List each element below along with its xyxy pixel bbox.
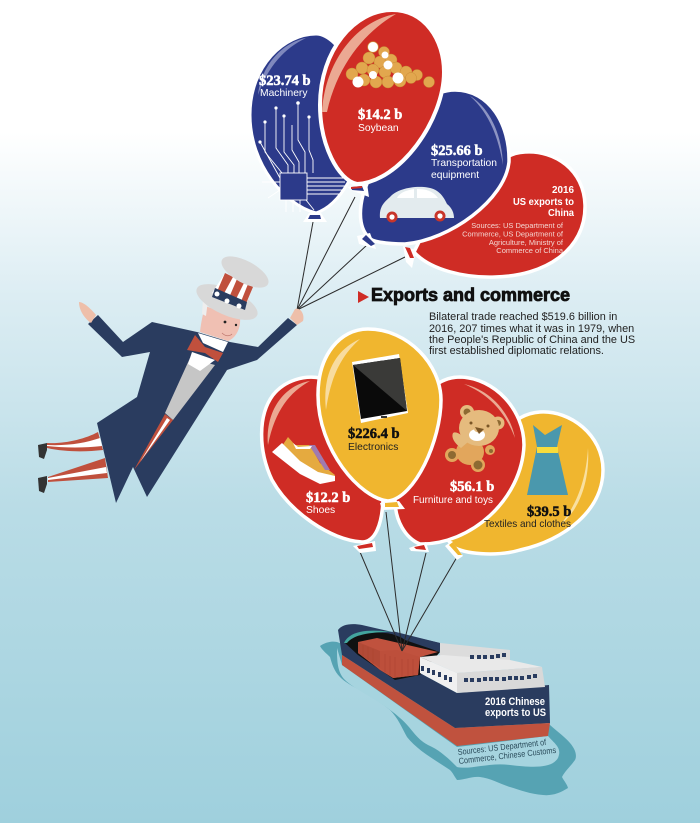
- bow tie: [187, 335, 223, 362]
- label: shoes: Shoes: [306, 505, 335, 516]
- label: machinery: Machinery: [260, 88, 308, 99]
- balloon: soybean: [320, 10, 444, 197]
- icon: sneaker: [272, 437, 335, 484]
- label: textiles: Textiles and clothes: [484, 519, 571, 530]
- face: [200, 306, 240, 341]
- value: electronics: $226.4 b: [348, 426, 400, 442]
- sources: exports: Commerce, US Department of: [462, 230, 564, 238]
- balloon: textiles and clothes: [430, 412, 603, 560]
- heading: 2016 US exports to China: 2016: [552, 184, 574, 196]
- value: shoes: $12.2 b: [306, 490, 350, 506]
- label: transportation: equipment: [431, 170, 479, 181]
- hat: [192, 277, 262, 327]
- section heading: Exports and commerce: Exports and commerce: [371, 285, 570, 305]
- heading: 2016 US exports to China: US exports to: [513, 196, 574, 208]
- heading: 2016 US exports to China: China: [548, 207, 574, 219]
- text block: bilateral trade: the People's Republic of China and the US: [429, 334, 635, 346]
- collar: [198, 333, 228, 352]
- label: furniture and toys: Furniture and toys: [413, 495, 493, 506]
- icon: dress: [527, 425, 568, 495]
- legs: [47, 432, 103, 451]
- icon: soybeans pile: [346, 42, 434, 88]
- icon: tablet: [352, 354, 408, 423]
- shirt: [188, 352, 215, 371]
- value: furniture and toys: $56.1 b: [450, 479, 494, 495]
- figure: Uncle Sam: [38, 250, 303, 503]
- sources: imports: Sources: US Department of: [457, 737, 547, 757]
- water between ship and shadow: [337, 648, 559, 768]
- value: machinery: $23.74 b: [259, 73, 311, 89]
- superstructure: [440, 643, 510, 665]
- text block: bilateral trade: 2016, 207 times what it was in 1979, when: [429, 323, 634, 335]
- containers: [358, 638, 438, 678]
- value: transportation: $25.66 b: [431, 143, 483, 159]
- hull: [338, 624, 550, 728]
- balloon: furniture and toys: [395, 377, 524, 552]
- balloon strings: exports: [297, 197, 405, 310]
- sources: imports: Commerce, Chinese Customs: [458, 745, 557, 766]
- balloon strings: imports: [360, 512, 457, 651]
- sources: exports: Sources: US Department of: [471, 221, 564, 230]
- value: textiles: $39.5 b: [527, 504, 571, 520]
- ship label: 2016 Chinese: [485, 696, 545, 708]
- vest: [165, 358, 215, 420]
- coat: [88, 315, 297, 503]
- balloon: shoes: [262, 377, 395, 553]
- ship label: exports to US: [485, 707, 546, 719]
- balloon: US exports to China: [403, 152, 585, 277]
- hands: [79, 302, 96, 323]
- icon: car: [380, 187, 454, 222]
- text block: bilateral trade: first established diplomatic relations.: [429, 345, 604, 357]
- label: transportation: Transportation: [431, 158, 497, 169]
- icon: circuit board: [260, 103, 345, 212]
- sources: exports: Agriculture, Ministry of: [489, 238, 564, 247]
- value: soybean: $14.2 b: [358, 107, 402, 123]
- icon: teddy bear: [445, 405, 504, 472]
- ship shadow on water: [320, 642, 576, 795]
- text block: bilateral trade: Bilateral trade reached $519.6 billion in: [429, 311, 617, 323]
- balloon: transportation equipment: [357, 90, 509, 249]
- sash: [134, 414, 173, 470]
- ship: [338, 624, 550, 746]
- label: soybean: Soybean: [358, 123, 399, 134]
- balloon: electronics: [318, 329, 441, 510]
- balloon: machinery: [250, 34, 366, 222]
- sources: exports: Commerce of China: [496, 246, 564, 255]
- label: electronics: Electronics: [348, 442, 398, 453]
